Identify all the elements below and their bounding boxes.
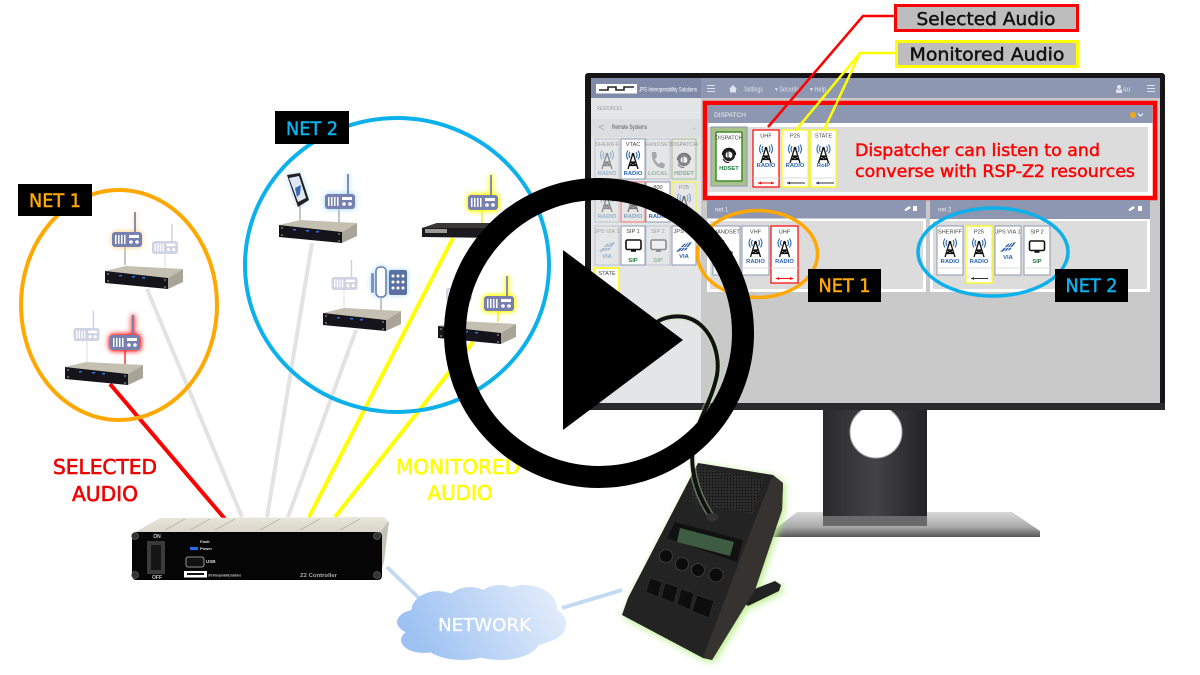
UHF selected card: RADIO bbox=[757, 163, 776, 169]
monitor net 2 ellipse bbox=[918, 208, 1068, 296]
STATE monitored card: RoIP bbox=[817, 163, 830, 169]
sidebar resource cards: LOCAL bbox=[648, 171, 668, 177]
resources sidebar heading bbox=[591, 106, 701, 137]
Z2 controller: Power bbox=[200, 546, 212, 551]
dispatch headset card bbox=[711, 127, 747, 186]
network cloud: NETWORK bbox=[438, 615, 532, 636]
net 1 label: NET 1 bbox=[29, 190, 81, 212]
UHF selected card bbox=[753, 130, 779, 187]
JPS VIA 1 card: JPS VIA 1 bbox=[995, 230, 1021, 236]
play button bbox=[455, 189, 743, 477]
P25 card bbox=[966, 226, 992, 283]
P25 card: RADIO bbox=[970, 259, 989, 265]
monitored audio callout: Monitored Audio bbox=[910, 46, 1064, 66]
UHF card: UHF bbox=[779, 230, 791, 236]
top navigation bar: ▾ Help bbox=[810, 86, 826, 94]
net 1 panel bbox=[707, 200, 926, 292]
monitored audio callout bbox=[796, 42, 1078, 130]
monitor stand bbox=[765, 406, 1040, 537]
sidebar resource cards bbox=[594, 139, 698, 314]
dispatch headset card: HDSET bbox=[719, 166, 739, 172]
screen background bbox=[591, 78, 1160, 403]
sidebar resource cards: 800 bbox=[653, 185, 663, 191]
sidebar resource cards: HDSET bbox=[674, 171, 694, 177]
HANDSET card bbox=[713, 226, 740, 275]
VHF card bbox=[742, 226, 769, 275]
JPS VIA 1 card bbox=[995, 226, 1021, 275]
sidebar resource cards: JPS VIA 1 bbox=[594, 229, 620, 235]
desk microphone bbox=[622, 316, 783, 660]
Z2 controller: JPS Interoperability Solutions bbox=[208, 572, 241, 578]
sidebar resource cards: DISPATCH bbox=[670, 142, 698, 148]
P25 monitored card bbox=[782, 130, 808, 187]
network cloud bbox=[397, 585, 566, 660]
sidebar resource cards: VIA bbox=[679, 254, 690, 260]
VHF card: VHF bbox=[750, 230, 762, 236]
sidebar resource cards: SIP 1 bbox=[626, 229, 640, 235]
net 1 circle bbox=[21, 190, 217, 420]
sidebar resource cards: SIP bbox=[653, 258, 663, 264]
sidebar resource cards: RADIO bbox=[624, 214, 643, 220]
sidebar resource cards: SIP 2 bbox=[651, 229, 665, 235]
top navigation bar: ▾ Security bbox=[775, 86, 799, 94]
UHF card: RADIO bbox=[775, 259, 794, 265]
sidebar resource cards: UHF bbox=[627, 185, 639, 191]
UHF selected card: UHF bbox=[760, 134, 772, 140]
resources sidebar heading: RESOURCES bbox=[597, 106, 623, 112]
SIP 2 card: SIP bbox=[1032, 259, 1042, 265]
dispatch panel: DISPATCH bbox=[714, 112, 746, 119]
dispatch panel bbox=[705, 103, 1155, 198]
SHERIFF card: SHERIFF bbox=[938, 230, 963, 236]
dispatcher note bbox=[855, 141, 1135, 181]
monitor net 1 label bbox=[808, 269, 881, 302]
selected audio label: SELECTED bbox=[53, 455, 157, 479]
device body bbox=[622, 463, 783, 660]
net 2 panel: net 2 bbox=[938, 208, 952, 214]
sidebar resource cards: SIP bbox=[628, 258, 638, 264]
sidebar bbox=[591, 98, 701, 403]
sidebar resource cards: RADIO bbox=[649, 214, 668, 220]
dispatcher note: converse with RSP-Z2 resources bbox=[855, 162, 1135, 181]
STATE monitored card bbox=[811, 130, 836, 187]
VHF card: RADIO bbox=[746, 259, 765, 265]
SHERIFF card bbox=[937, 226, 963, 275]
Z2 controller: ON bbox=[153, 534, 161, 540]
SHERIFF card: RADIO bbox=[941, 259, 960, 265]
resources sidebar heading: Remote Systems bbox=[612, 124, 648, 131]
top navigation bar: su bbox=[1123, 86, 1130, 94]
selected audio label: AUDIO bbox=[72, 482, 138, 506]
sidebar resource cards: STATE bbox=[598, 271, 616, 277]
JPS VIA 1 card: VIA bbox=[1003, 255, 1014, 261]
sidebar resource cards: VHF bbox=[601, 185, 613, 191]
icon: desk phone bbox=[371, 267, 407, 297]
sidebar resource cards: RADIO bbox=[598, 171, 617, 177]
monitored audio label bbox=[396, 455, 520, 505]
top navigation bar: JPS Interoperability Solutions bbox=[639, 86, 698, 94]
sidebar resource cards: RADIO bbox=[624, 171, 643, 177]
STATE monitored card: STATE bbox=[815, 134, 832, 140]
icon: smartphone bbox=[287, 173, 309, 207]
sidebar resource cards: VTAC bbox=[626, 142, 640, 148]
flat black network unit bbox=[422, 223, 505, 238]
P25 monitored card: RADIO bbox=[786, 163, 805, 169]
sidebar resource cards: JPS VIA bbox=[674, 229, 695, 235]
net 2 devices bbox=[279, 173, 516, 344]
control knobs bbox=[660, 550, 723, 582]
Z2 controller: Fault bbox=[200, 539, 210, 544]
UHF card bbox=[771, 226, 798, 283]
HANDSET card: HANDSET bbox=[713, 230, 740, 236]
speaker grille bbox=[690, 467, 763, 514]
net 2 label: NET 2 bbox=[286, 118, 338, 140]
LCD display bbox=[667, 522, 743, 562]
monitored audio label: MONITORED bbox=[396, 455, 520, 479]
sidebar resource cards: RADIO bbox=[675, 214, 694, 220]
net 2 circle bbox=[245, 118, 549, 412]
net 1 devices bbox=[65, 212, 183, 385]
monitor bbox=[585, 73, 1165, 410]
SIP 2 card bbox=[1024, 226, 1050, 275]
top navigation bar: Settings bbox=[744, 86, 763, 94]
selected audio callout bbox=[768, 6, 1078, 127]
P25 card: P25 bbox=[974, 230, 984, 236]
monitor net 1 ellipse bbox=[698, 210, 818, 298]
mic gooseneck bbox=[652, 316, 718, 521]
SIP 2 card: SIP 2 bbox=[1030, 230, 1044, 236]
push buttons bbox=[646, 578, 714, 618]
Z2 controller: OFF bbox=[152, 575, 162, 581]
Z2 controller: Z2 Controller bbox=[300, 573, 338, 579]
Z2 controller: USB bbox=[206, 559, 216, 564]
dispatch headset card: DISPATCH bbox=[715, 136, 743, 142]
P25 monitored card: P25 bbox=[790, 134, 800, 140]
selected audio label bbox=[53, 455, 157, 506]
sidebar resource cards: P25 bbox=[679, 185, 689, 191]
net 1 panel: net 1 bbox=[715, 208, 729, 214]
connection lines from controller to resources bbox=[110, 238, 622, 608]
monitor net 2 label: NET 2 bbox=[1066, 275, 1118, 297]
sidebar resource cards: SHERIFF bbox=[595, 142, 620, 148]
net 2 panel bbox=[930, 200, 1150, 292]
sidebar resource cards: RADIO bbox=[598, 214, 617, 220]
top navigation bar bbox=[591, 78, 1160, 98]
resources sidebar heading: ⌄ bbox=[692, 125, 696, 131]
net 2 label bbox=[275, 111, 349, 144]
net 1 label bbox=[18, 184, 92, 216]
Z2 controller bbox=[132, 517, 389, 581]
sidebar resource cards: HANDSET bbox=[645, 142, 672, 148]
selected audio callout: Selected Audio bbox=[916, 10, 1056, 30]
sidebar resource cards: VIA bbox=[602, 254, 613, 260]
monitor net 1 label: NET 1 bbox=[818, 275, 870, 297]
dispatcher note: Dispatcher can listen to and bbox=[855, 141, 1100, 160]
monitored audio label: AUDIO bbox=[428, 481, 492, 505]
monitor net 2 label bbox=[1055, 269, 1128, 302]
